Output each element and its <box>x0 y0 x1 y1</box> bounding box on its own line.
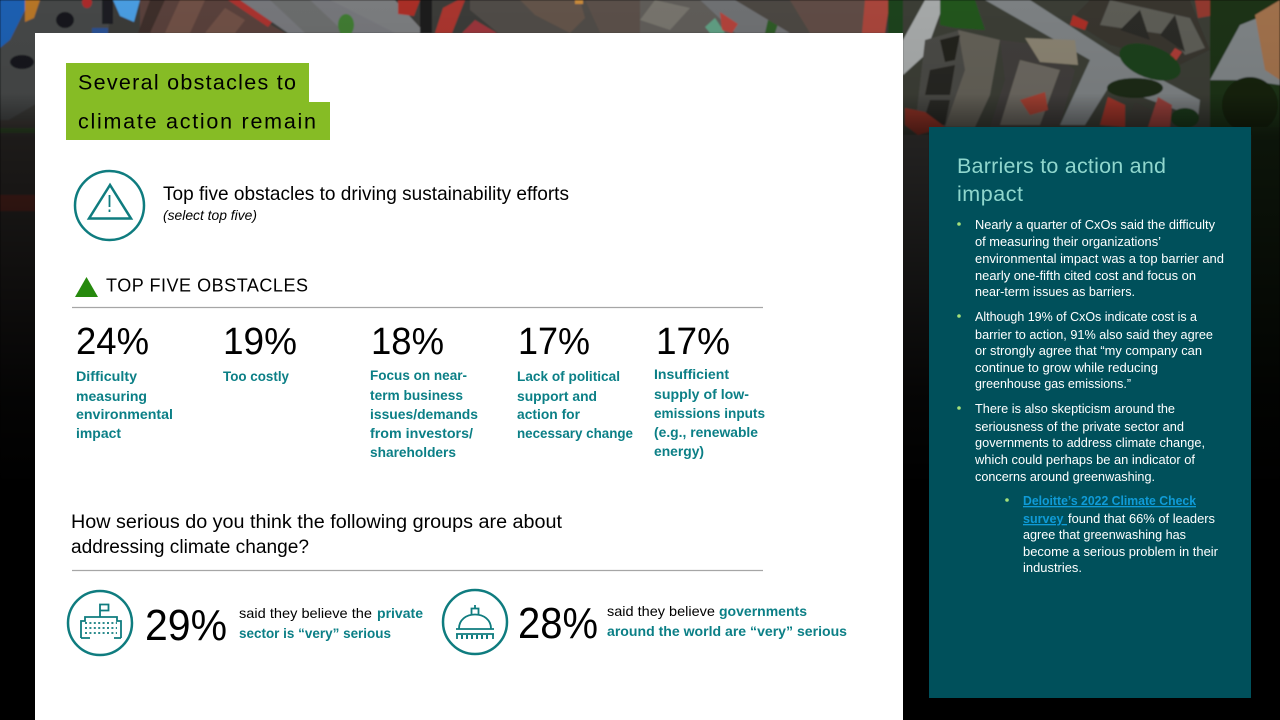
panel heading <box>957 154 1166 206</box>
stat: private sector 29%: sector is “very” serious <box>239 625 391 641</box>
bullet 3 <box>957 401 1205 484</box>
bullet 2: greenhouse gas emissions.” <box>975 376 1131 391</box>
bullet 3: which could perhaps be an indicator of <box>974 452 1195 467</box>
obstacle 1: 24% <box>76 321 173 441</box>
bullet 1: of measuring their organizations’ <box>975 234 1161 249</box>
bullet 2: Although 19% of CxOs indicate cost is a <box>975 309 1198 324</box>
obstacle 4: 17%: necessary change <box>517 425 633 441</box>
bullet 2 <box>957 309 1213 391</box>
sub-bullet: greenwashing survey: survey <box>1023 511 1067 526</box>
stat: private sector 29%: 29% <box>145 601 227 650</box>
panel heading: Barriers to action and <box>957 154 1166 178</box>
sub-bullet: greenwashing survey: industries. <box>1023 560 1082 575</box>
bullet 1: environmental impact was a top barrier and <box>975 251 1224 266</box>
bullet 1: nearly one-fifth cited cost and focus on <box>975 268 1196 283</box>
bullet 1: near-term issues as barriers. <box>975 284 1135 299</box>
survey question: How serious do you think the following groups are about <box>71 512 563 533</box>
stat: private sector 29%: private <box>377 605 423 621</box>
icon: private sector building <box>68 591 132 655</box>
obstacle 4: 17%: Lack of political <box>517 368 620 384</box>
title: Several obstacles to <box>78 70 296 94</box>
sub-bullet: greenwashing survey: agree that greenwashing has <box>1023 527 1186 542</box>
obstacle 3: 18%: from investors/ <box>370 425 473 441</box>
obstacle 1: 24%: 24% <box>76 321 149 363</box>
obstacle 2: 19%: 19% <box>223 321 297 363</box>
bullet 3: There is also skepticism around the <box>975 401 1175 416</box>
section heading: top five obstacles: TOP FIVE OBSTACLES <box>106 276 308 296</box>
obstacle 4: 17% <box>517 321 633 441</box>
obstacle 5: 17% <box>654 321 765 459</box>
obstacle 1: 24%: Difficulty <box>76 368 137 384</box>
obstacle 4: 17%: action for <box>517 406 581 422</box>
bullet 3: seriousness of the private sector and <box>975 419 1184 434</box>
title: climate action remain <box>78 110 316 134</box>
sub-bullet: greenwashing survey <box>1005 493 1219 575</box>
stat: governments 28%: governments <box>719 603 807 619</box>
stat: governments 28%: around the world are “very” serious <box>607 623 847 639</box>
stat: private sector 29%: said they believe the <box>239 605 372 621</box>
icon: warning triangle <box>75 171 144 240</box>
obstacle 4: 17%: 17% <box>518 321 590 363</box>
obstacle 2: 19%: Too costly <box>223 368 289 384</box>
bullet 1 <box>957 217 1224 299</box>
panel heading: impact <box>957 182 1023 206</box>
obstacle 3: 18% <box>370 321 478 460</box>
obstacle 5: 17%: (e.g., renewable <box>654 424 758 440</box>
obstacle 1: 24%: measuring <box>76 388 147 404</box>
obstacle 3: 18%: shareholders <box>370 444 456 460</box>
survey question: addressing climate change? <box>71 537 309 558</box>
obstacle 3: 18%: 18% <box>371 321 444 363</box>
chart heading: (select top five) <box>163 207 257 223</box>
stat: governments 28% <box>518 599 847 648</box>
obstacle 1: 24%: impact <box>76 425 121 441</box>
obstacle 5: 17%: emissions inputs <box>654 405 765 421</box>
sub-bullet: greenwashing survey: found that 66% of leaders <box>1068 511 1215 526</box>
bullet 3: concerns around greenwashing. <box>975 469 1155 484</box>
obstacle 5: 17%: supply of low- <box>654 386 749 402</box>
obstacle 3: 18%: issues/demands <box>370 406 478 422</box>
title <box>66 63 330 140</box>
bullet 3: governments to address climate change, <box>975 435 1205 450</box>
survey question <box>71 512 563 558</box>
bullet 2: barrier to action, 91% also said they agree <box>975 327 1213 342</box>
sub-bullet: greenwashing survey: Deloitte’s 2022 Climate Check <box>1023 493 1197 508</box>
obstacle 4: 17%: support and <box>517 388 597 404</box>
stat: private sector 29% <box>145 601 423 650</box>
chart heading <box>163 183 569 223</box>
bullet 2: or strongly agree that “my company can <box>975 343 1202 358</box>
obstacle 1: 24%: environmental <box>76 406 173 422</box>
obstacle 3: 18%: Focus on near- <box>370 367 467 383</box>
obstacle 5: 17%: energy) <box>654 443 704 459</box>
sub-bullet: greenwashing survey: become a serious problem in their <box>1023 544 1219 559</box>
obstacle 5: 17%: Insufficient <box>654 366 729 382</box>
icon: government capitol dome <box>443 590 507 654</box>
obstacle 5: 17%: 17% <box>656 321 730 363</box>
obstacle 3: 18%: term business <box>370 387 463 403</box>
stat: governments 28%: 28% <box>518 599 598 648</box>
white content panel <box>35 33 903 720</box>
obstacle 2: 19% <box>223 321 297 384</box>
stat: governments 28%: said they believe <box>607 603 715 619</box>
chart heading: Top five obstacles to driving sustainability efforts <box>163 183 569 205</box>
bullet 2: continue to grow while reducing <box>975 360 1158 375</box>
bullet 1: Nearly a quarter of CxOs said the difficulty <box>975 217 1215 232</box>
panel: barriers to action and impact <box>929 127 1251 698</box>
